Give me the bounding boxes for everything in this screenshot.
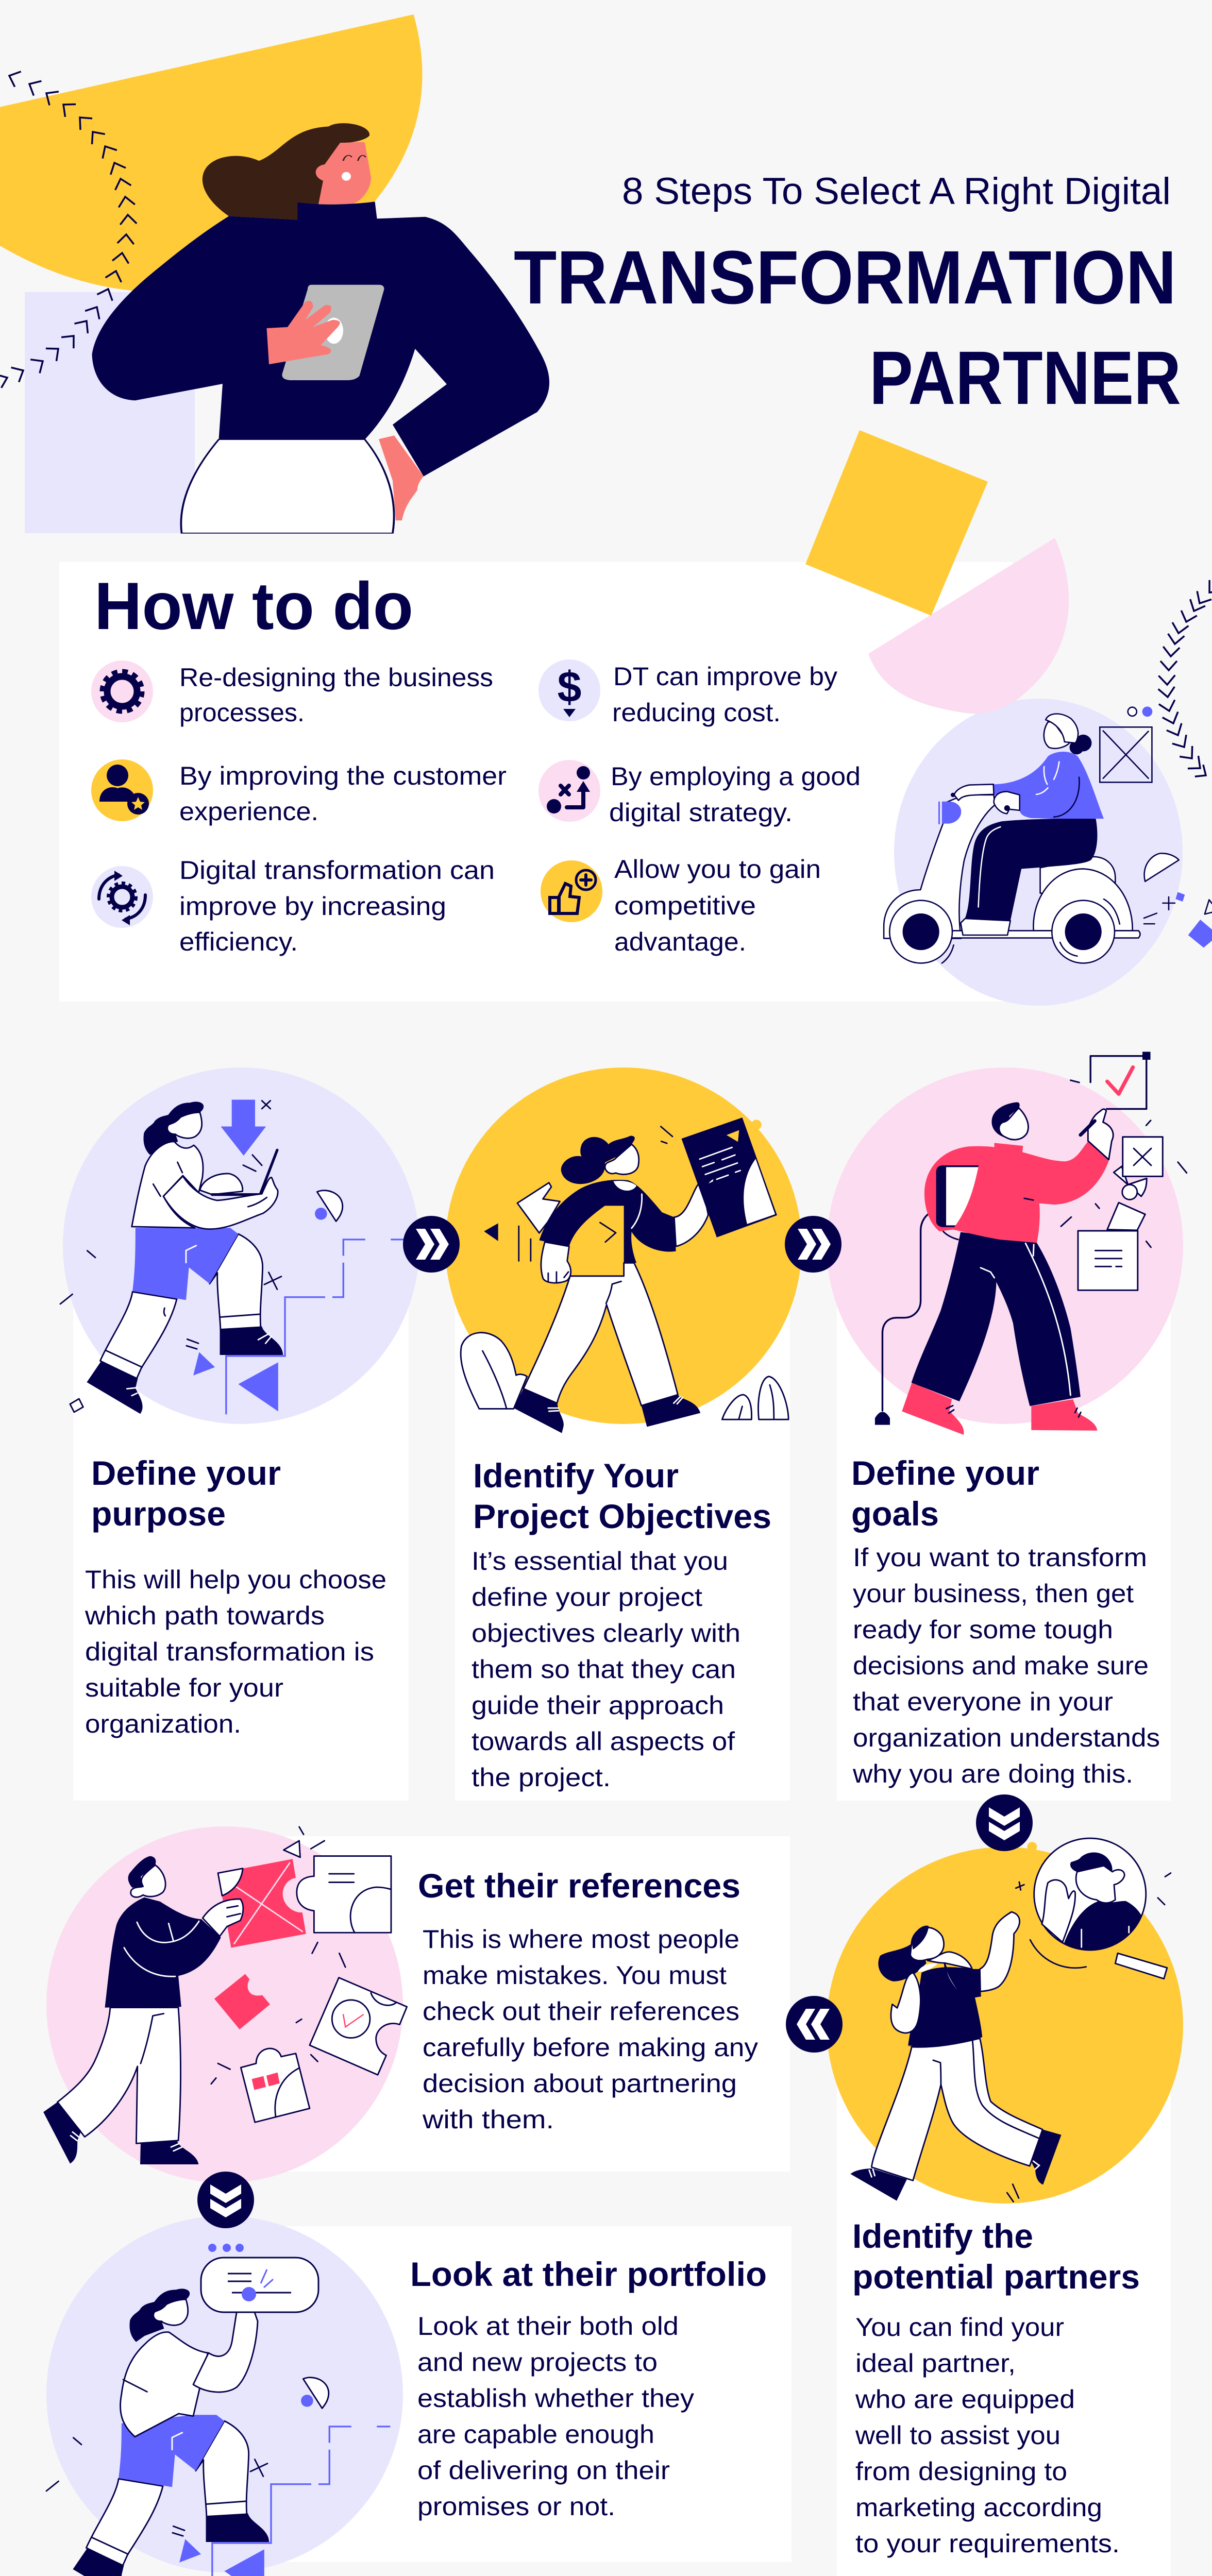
text: look at their portfolio: [410, 2255, 767, 2521]
text: define your purpose: digital transformation is: [85, 1637, 374, 1666]
panel: get their references card: [225, 1836, 790, 2172]
text: define your purpose: which path towards: [85, 1601, 325, 1630]
illustration: woman pressing screen button: [46, 2289, 390, 2576]
text: identify the potential partners: ideal partner,: [855, 2349, 1016, 2378]
panel: look at their portfolio card: [225, 2226, 792, 2562]
text: digital strategy: [609, 762, 861, 827]
text: identify your project objectives: Identify Your: [473, 1456, 679, 1495]
text: define your goals: goals: [851, 1495, 939, 1533]
circle: step 2: [445, 1067, 802, 1424]
panel: step 2 card: [455, 1288, 790, 1801]
text: define your goals: your business, then get: [853, 1579, 1134, 1608]
text: define your goals: ready for some tough: [853, 1615, 1113, 1644]
heading: how to do: How to do: [94, 568, 413, 643]
text: identify the potential partners: to your requirements.: [855, 2529, 1120, 2558]
text: identify your project objectives: It’s essential that you: [472, 1547, 728, 1575]
illustration: woman climbing stairs with laptop: [60, 1100, 404, 1414]
text: define your purpose: This will help you choose: [85, 1565, 386, 1594]
text: efficiency: [179, 856, 495, 956]
text: identify the potential partners: Identify the: [852, 2217, 1033, 2255]
text: define your purpose: organization.: [85, 1709, 241, 1738]
text: re-designing: processes.: [179, 698, 305, 727]
text: reducing cost: [612, 662, 837, 727]
text: identify your project objectives: the project.: [472, 1763, 611, 1792]
text: re-designing: [179, 663, 493, 727]
text: customer experience: experience.: [179, 797, 318, 826]
text: define your purpose: purpose: [91, 1495, 226, 1533]
text: define your goals: why you are doing this.: [852, 1759, 1133, 1788]
text: digital strategy: digital strategy.: [609, 798, 793, 827]
text: reducing cost: reducing cost.: [612, 698, 781, 727]
icon: screen pill with button: [201, 2244, 318, 2312]
icon: gear: [91, 660, 153, 722]
decorative chevron chain: top left: [0, 68, 137, 388]
circle: step 6: [46, 1826, 403, 2183]
arrow: step 4 to step 5: [786, 1996, 843, 2053]
text: customer experience: By improving the customer: [179, 761, 507, 790]
text: identify your project objectives: towards all aspects of: [472, 1727, 735, 1756]
text: efficiency: improve by increasing: [179, 892, 446, 921]
text: define your goals: [851, 1454, 1160, 1788]
illustration: man with checklist: [875, 1052, 1187, 1435]
text: get their references: This is where most people: [423, 1925, 739, 1954]
text: look at their portfolio: of delivering on their: [417, 2456, 670, 2485]
decorative yellow square: [805, 430, 988, 616]
panel: how to do: [59, 562, 1183, 1006]
circle: step 5: [46, 2216, 403, 2572]
text: define your purpose: Define your: [91, 1454, 281, 1492]
text: get their references: Get their references: [418, 1867, 740, 1905]
text: define your goals: that everyone in your: [853, 1687, 1113, 1716]
decorative pink wedge: [868, 538, 1069, 714]
text: identify the potential partners: well to assist you: [855, 2421, 1060, 2450]
scooter backdrop circle: [894, 699, 1183, 1006]
text: look at their portfolio: Look at their portfolio: [410, 2255, 767, 2293]
text: look at their portfolio: promises or not.: [417, 2492, 615, 2521]
text: get their references: make mistakes. You must: [423, 1961, 727, 1990]
text: look at their portfolio: are capable enough: [417, 2420, 654, 2449]
text: identify your project objectives: objectives clearly with: [472, 1619, 740, 1648]
title: TRANSFORMATION: [514, 235, 1176, 320]
text: define your goals: Define your: [851, 1454, 1039, 1492]
hero illustration: woman with tablet: [0, 14, 549, 533]
panel: step 1 card: [73, 1288, 409, 1801]
text: customer experience: [179, 761, 507, 826]
text: define your purpose: suitable for your: [85, 1673, 283, 1702]
text: efficiency: efficiency.: [179, 927, 298, 956]
text: identify your project objectives: guide their approach: [472, 1691, 724, 1720]
text: identify your project objectives: them so that they can: [472, 1655, 736, 1684]
panel: step 3 card: [837, 1288, 1171, 1801]
icon: efficiency: [91, 866, 153, 928]
arrow: step 3 to step 4: [976, 1794, 1033, 1851]
circle: step 1: [63, 1067, 419, 1424]
text: identify the potential partners: who are equipped: [855, 2385, 1075, 2414]
text: competitive advantage: competitive: [614, 891, 756, 920]
icon: thumbs up: [541, 860, 602, 922]
text: identify the potential partners: [852, 2217, 1140, 2558]
text: identify the potential partners: from designing to: [855, 2457, 1067, 2486]
text: get their references: with them.: [422, 2105, 554, 2134]
text: identify your project objectives: [472, 1456, 771, 1792]
title: [514, 171, 1181, 420]
icon: customer: [91, 759, 153, 821]
illustration: woman on scooter: [884, 706, 1212, 963]
icon: dollar: [538, 659, 600, 721]
decorative chevron chain: right: [1158, 580, 1212, 781]
circle: step 4: [827, 1847, 1183, 2204]
text: identify your project objectives: define your project: [472, 1583, 702, 1612]
text: define your goals: organization understands: [853, 1723, 1160, 1752]
text: competitive advantage: Allow you to gain: [614, 855, 821, 884]
icon: dollar: $: [558, 663, 581, 711]
text: re-designing: Re-designing the business: [179, 663, 493, 692]
text: look at their portfolio: and new projects to: [417, 2348, 658, 2377]
text: look at their portfolio: Look at their both old: [417, 2312, 679, 2341]
text: define your purpose: [85, 1454, 386, 1738]
text: get their references: [418, 1867, 758, 2134]
text: reducing cost: DT can improve by: [613, 662, 837, 691]
text: identify the potential partners: You can find your: [855, 2313, 1064, 2342]
text: get their references: carefully before making any: [423, 2033, 758, 2062]
illustration: woman holding document: [461, 1117, 788, 1433]
arrow: step 1 to step 2: [403, 1216, 460, 1273]
icon: strategy: [538, 760, 600, 822]
title: 8 Steps To Select A Right Digital: [622, 171, 1171, 212]
arrow: step 2 to step 3: [785, 1216, 841, 1273]
circle: step 3: [827, 1067, 1183, 1424]
text: identify the potential partners: marketing according: [855, 2493, 1102, 2522]
text: efficiency: Digital transformation can: [179, 856, 495, 885]
text: define your goals: decisions and make sure: [853, 1651, 1149, 1680]
text: digital strategy: By employing a good: [611, 762, 861, 791]
text: define your goals: If you want to transform: [853, 1543, 1147, 1572]
text: competitive advantage: [614, 855, 821, 956]
text: get their references: decision about partnering: [423, 2069, 737, 2098]
text: identify the potential partners: potential partners: [852, 2258, 1140, 2296]
illustration: woman reaching to speech bubble: [850, 1838, 1171, 2202]
illustration: man with puzzle pieces: [43, 1827, 407, 2164]
text: identify your project objectives: Project Objectives: [473, 1497, 771, 1535]
arrow: step 5 to step 6: [197, 2172, 254, 2228]
panel: identify the potential partners card: [837, 2009, 1171, 2576]
text: competitive advantage: advantage.: [614, 927, 746, 956]
text: get their references: check out their references: [423, 1997, 739, 2026]
text: look at their portfolio: establish whether they: [417, 2384, 694, 2413]
